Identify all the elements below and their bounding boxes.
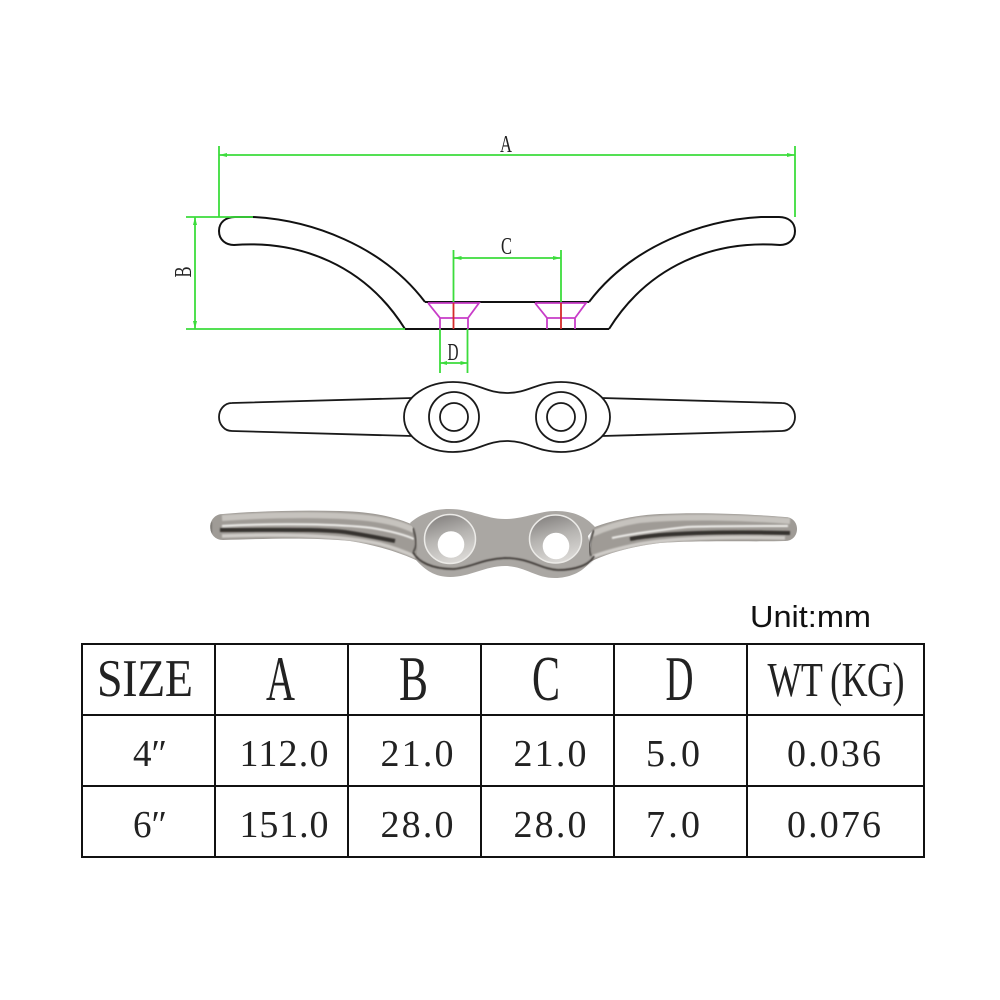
table header row: SIZE [97, 649, 193, 708]
left countersink [424, 514, 476, 564]
side view drawing [171, 132, 795, 373]
table header row: B [399, 643, 428, 714]
table row 4 inch: 112.0 [240, 733, 328, 775]
base plate outline [404, 382, 610, 452]
table row 4 inch [133, 733, 881, 775]
base plate lower edge [413, 552, 594, 570]
countersunk holes [428, 303, 586, 329]
table row 6 inch: 0.076 [787, 804, 881, 846]
dimension labels [171, 132, 512, 366]
table row 6 inch: 28.0 [380, 804, 454, 846]
right arm outline [602, 398, 795, 436]
left screw hole [438, 531, 464, 558]
left arm [210, 510, 418, 560]
left arm outline [219, 398, 412, 436]
base plate [410, 509, 595, 578]
table header row: WT (KG) [768, 654, 904, 707]
table row 6 inch [133, 804, 881, 846]
table row 6 inch: 151.0 [240, 804, 328, 846]
table row 6 inch: 28.0 [514, 804, 586, 846]
right countersink [530, 515, 582, 563]
table grid [82, 644, 924, 857]
table row 4 inch: 4″ [133, 733, 167, 775]
right screw hole [543, 533, 569, 559]
dimension table [82, 643, 924, 857]
table row 6 inch: 7.0 [646, 804, 700, 846]
dimension lines [186, 146, 795, 373]
dimension labels: D [448, 340, 458, 366]
table row 4 inch: 5.0 [646, 733, 700, 775]
table header row: D [665, 643, 694, 714]
cleat dimension infographic [81, 136, 925, 858]
table row 6 inch: 6″ [133, 804, 167, 846]
dimension labels: C [501, 234, 512, 260]
product photo: stainless cleat [205, 505, 805, 578]
table row 4 inch: 21.0 [380, 733, 454, 775]
unit label: Unit:mm [750, 599, 871, 634]
dimension labels: B [171, 266, 197, 278]
dimension labels: A [500, 132, 512, 158]
table header row [97, 643, 904, 714]
right hole circles [536, 392, 586, 442]
right junction shading [590, 530, 594, 556]
right arm [590, 513, 797, 562]
left junction shading [413, 528, 416, 552]
table header row: A [266, 643, 295, 714]
left hole circles [429, 392, 479, 442]
dimension arrowheads [193, 153, 795, 365]
table header row: C [532, 643, 560, 714]
table row 4 inch: 0.036 [787, 733, 881, 775]
top view drawing [219, 382, 795, 452]
cleat side outline [219, 217, 795, 329]
table row 4 inch: 21.0 [514, 733, 586, 775]
